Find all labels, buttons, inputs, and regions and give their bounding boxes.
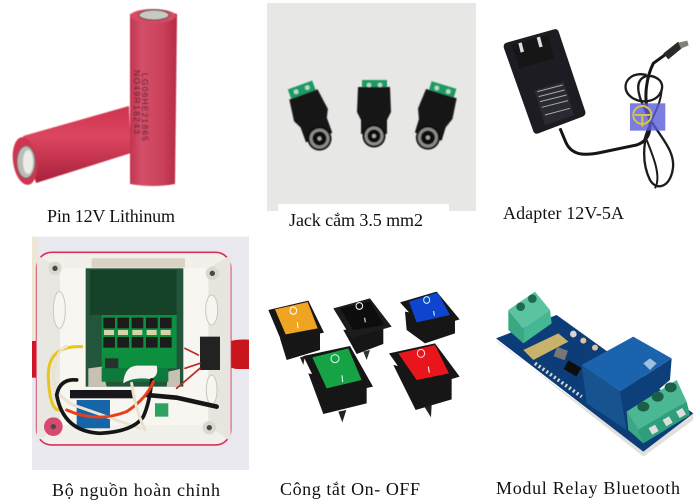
jack left (283, 79, 341, 156)
caption: switches: Công tắt On- OFF (280, 479, 420, 499)
caption: power box: Bộ nguồn hoàn chỉnh (52, 480, 220, 500)
photo: lithium cells: NO49R18243 (132, 70, 142, 134)
photo: lithium cells: LG06HE21865 (140, 73, 150, 141)
icon: blue watermark (630, 103, 665, 131)
switch green (303, 346, 373, 422)
photo: power adapter (504, 29, 689, 188)
switch red (389, 343, 460, 417)
photo: five switches (268, 292, 460, 422)
panel: jack connectors (267, 3, 476, 234)
caption: relay: Modul Relay Bluetooth (496, 478, 680, 498)
relay block (582, 337, 672, 430)
caption: adapter: Adapter 12V-5A (503, 203, 624, 223)
panel: rocker switches (268, 292, 460, 499)
panel: battery (10, 9, 177, 226)
terminal left (508, 292, 552, 343)
panel: finished power box (32, 237, 249, 500)
photo: relay board (496, 292, 693, 457)
jack centre (357, 80, 391, 148)
switch black (333, 298, 392, 360)
jack right (407, 80, 461, 154)
caption box (278, 204, 449, 234)
terminal right (627, 380, 690, 443)
switch amber (268, 301, 324, 365)
caption: battery: Pin 12V Lithinum (47, 206, 175, 226)
panel: Bluetooth relay module (496, 292, 693, 498)
photo background (267, 3, 476, 211)
caption: jack: Jack cắm 3.5 mm2 (289, 210, 423, 230)
photo: open enclosure (32, 237, 249, 470)
panel: adapter (503, 29, 689, 223)
switch blue (400, 292, 460, 343)
photo: lithium cells (10, 9, 177, 186)
